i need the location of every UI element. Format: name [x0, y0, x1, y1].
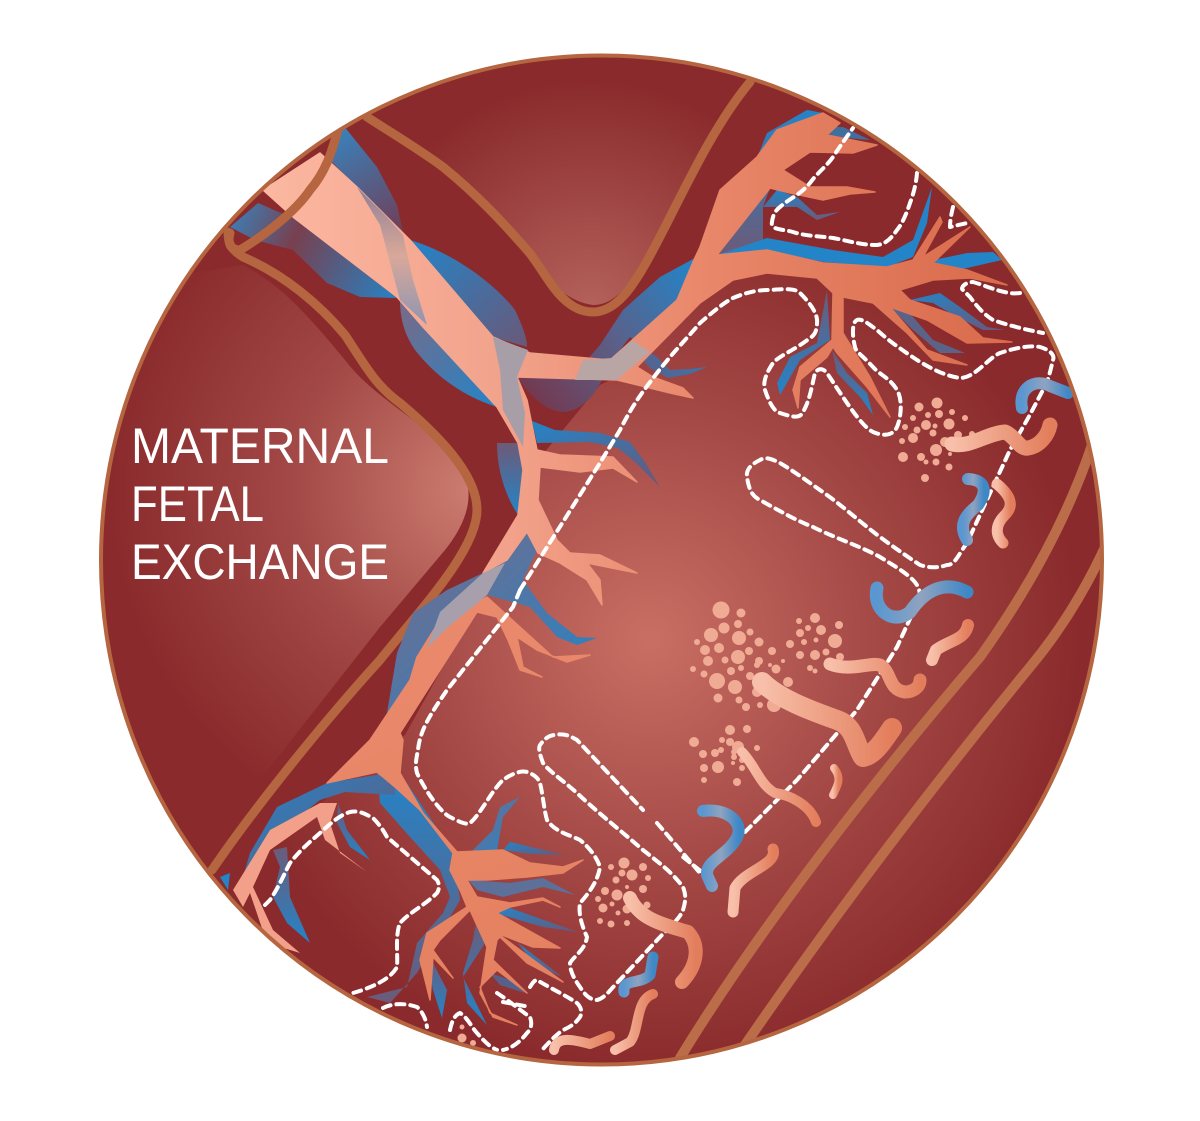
- panel: left lobe: [158, 270, 468, 742]
- small blue capillaries: [624, 383, 1068, 992]
- panel: top lobe: [454, 113, 701, 305]
- translucent crossing over branch: [575, 340, 650, 380]
- cuff of umbilical cord: [229, 130, 338, 250]
- umbilical cord and upper villous tree: [263, 113, 1012, 605]
- blue vessels: [220, 110, 1005, 1025]
- lower villous tree: [327, 597, 590, 1025]
- disc outline: [101, 56, 1102, 1064]
- cluster: upper right: [898, 398, 975, 482]
- title text: [134, 428, 388, 580]
- alveolar clusters: [458, 398, 975, 1046]
- title text: MATERNAL: [131, 418, 389, 474]
- panel: dark maternal channel: [288, 262, 683, 806]
- cluster: centre small: [786, 613, 844, 674]
- translucent ribbon down: [493, 337, 528, 447]
- cluster: centre large: [690, 602, 793, 712]
- translucent ribbon over cord: [357, 187, 427, 325]
- cluster: edge: [458, 1024, 476, 1046]
- cluster: lower centre: [689, 725, 760, 786]
- vessel walls: [212, 82, 1106, 1058]
- cluster: bottom: [595, 858, 651, 928]
- worm-like capillaries: [554, 425, 1050, 1050]
- dashed villus outlines: [265, 128, 1053, 1052]
- title text: EXCHANGE: [131, 534, 389, 590]
- translucent trunk crossing: [427, 563, 505, 648]
- title text: FETAL: [131, 476, 264, 532]
- left fork of lower tree: [233, 803, 367, 953]
- panel: central tissue glow: [322, 277, 1028, 1018]
